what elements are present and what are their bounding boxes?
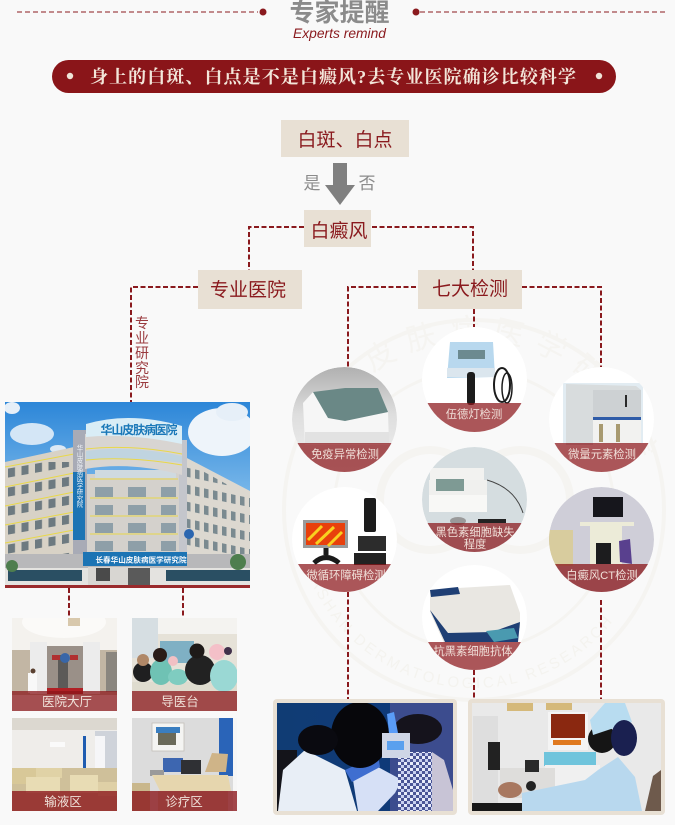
header [17,0,665,41]
circle: microcirculation [292,487,397,592]
circle: CT: 白癜风CT检测 [566,568,638,582]
connector lines [69,227,601,699]
box: vitiligo: 白癜风 [310,220,368,242]
circle: immune test [292,367,397,472]
circle: trace element: 微量元素检测 [568,447,636,461]
caption: lobby: 医院大厅 [42,695,92,709]
circle: immune test: 免疫异常检测 [311,447,379,461]
sign: hospital name [86,418,182,444]
circle: CT [549,487,654,592]
circle: melanocyte loss [422,447,527,552]
caption: infusion [12,791,117,811]
circle: melanocyte loss: 程度 [464,537,486,551]
circle: wood lamp [422,327,527,432]
vertical label: research institute: 究 [135,360,149,376]
photo: wood lamp examination [273,699,457,815]
arrow: yes / no: 否 [358,174,376,193]
box: white patches [281,120,409,157]
circle: wood lamp: 伍德灯检测 [446,407,502,421]
photo: CT examination [468,699,665,815]
vertical label: research institute: 业 [135,330,149,346]
caption: lobby [12,691,117,711]
caption: infusion: 输液区 [44,794,82,809]
box: vitiligo [304,210,371,247]
vertical label: research institute: 研 [135,345,149,361]
photo: hospital lobby [12,618,117,695]
box: specialist hospital [198,270,302,309]
vertical label: research institute: 专 [135,315,149,331]
caption: clinic: 诊疗区 [165,795,203,809]
vertical label: research institute: 院 [135,374,149,390]
caption: clinic [132,791,237,811]
box: white patches: 白斑、白点 [297,129,393,151]
watermark seal: 华山皮肤病医学研究院 [297,314,665,473]
circle: trace element [549,367,654,472]
circle: antibody: 抗黑素细胞抗体 [433,644,513,658]
caption: guide desk [132,691,237,711]
circle: antibody [428,585,522,670]
banner pill [52,60,616,93]
sign: hospital name: 华山皮肤病医院 [100,422,178,437]
subtitle: Experts remind [293,25,387,41]
watermark seal: HUASHAN DERMATOLOGICAL RESEARCH [310,580,612,688]
vertical label: research institute [135,315,149,390]
hospital photo: 华山皮肤病医学研究院 [76,443,83,509]
banner pill: 身上的白斑、白点是不是白癜风?去专业医院确诊比较科学 [90,66,576,87]
photo: consultation area [132,718,237,811]
circle: melanocyte loss: 黑色素细胞缺失 [435,525,515,539]
arrow: yes / no [304,163,376,205]
box: seven tests: 七大检测 [432,278,508,300]
circle: microcirculation: 微循环障碍检测 [306,568,386,582]
box: seven tests [418,270,522,309]
box: specialist hospital: 专业医院 [210,279,286,301]
arrow: yes / no: 是 [304,174,320,193]
hospital photo [4,402,256,588]
caption: guide desk: 导医台 [161,694,199,709]
photo: guide desk [132,618,238,711]
photo: infusion area [12,718,117,811]
hospital photo: 长春华山皮肤病医学研究院 [95,554,187,564]
watermark seal [310,320,652,688]
